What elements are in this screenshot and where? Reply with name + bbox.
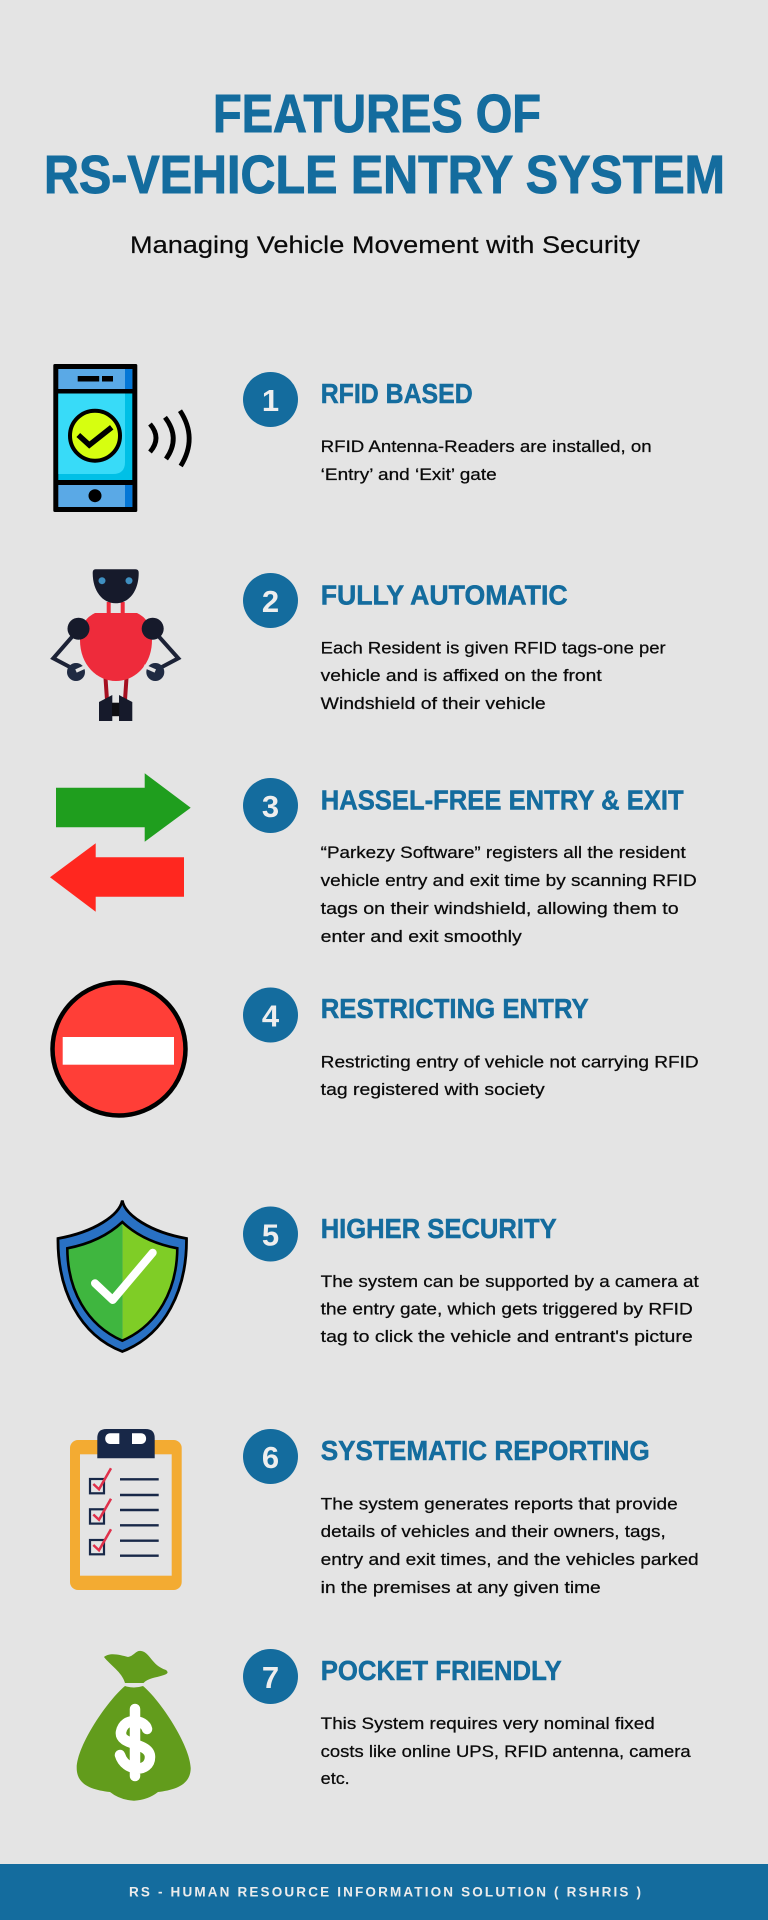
icon: phone with RFID waves [53,364,189,512]
number badge 1 [243,372,298,427]
body text 7: costs like online UPS, RFID antenna, camera [321,1742,691,1761]
body text 6: in the premises at any given time [321,1578,601,1597]
number badge 3 [243,778,298,833]
body text 1: ‘Entry’ and ‘Exit’ gate [321,465,497,484]
icon: money bag [77,1651,191,1801]
body text 7: etc. [321,1769,350,1788]
subtitle: Managing Vehicle Movement with Security [130,232,640,259]
body text 3: vehicle entry and exit time by scanning RFID [321,871,697,890]
body text 6: entry and exit times, and the vehicles parked [321,1550,699,1569]
icon: security shield [58,1200,187,1352]
heading: fully automatic: FULLY AUTOMATIC [321,579,568,610]
item 4 [243,988,699,1099]
body text 3: tags on their windshield, allowing them to [321,899,679,918]
body text 6: The system generates reports that provide [321,1494,678,1514]
body text 4: tag registered with society [321,1080,545,1099]
body text 7 [321,1714,691,1788]
footer band [0,1864,768,1920]
body text 1 [321,437,652,484]
heading: hassel-free entry and exit: HASSEL-FREE ENTRY & EXIT [321,784,684,815]
number badge 3: 3 [262,789,279,824]
body text 5: tag to click the vehicle and entrant's picture [321,1327,693,1346]
title [44,84,725,205]
number badge 2 [243,573,298,628]
body text 2: Each Resident is given RFID tags-one per [321,638,666,657]
heading: RFID based: RFID BASED [321,378,473,409]
number badge 1: 1 [262,383,279,418]
body text 4 [321,1053,699,1099]
body text 2 [321,638,666,713]
body text 3: “Parkezy Software” registers all the resident [321,843,686,862]
item 1 [243,372,652,484]
body text 6 [321,1494,699,1597]
footer band: RS - HUMAN RESOURCE INFORMATION SOLUTION ( RSHRIS ) [129,1884,641,1900]
item 7 [243,1649,691,1788]
item 2 [243,573,666,713]
icon: robot [53,569,178,721]
number badge 4 [243,988,298,1042]
number badge 6: 6 [262,1440,279,1475]
number badge 5: 5 [262,1218,279,1252]
heading: pocket friendly: POCKET FRIENDLY [321,1655,562,1686]
number badge 7: 7 [262,1660,279,1695]
number badge 7 [243,1649,298,1704]
number badge 6 [243,1429,298,1484]
heading: higher security: HIGHER SECURITY [321,1213,557,1244]
body text 3: enter and exit smoothly [321,927,522,946]
item 3 [243,778,697,946]
body text 5: the entry gate, which gets triggered by RFID [321,1300,693,1318]
icon: no-entry sign [52,982,186,1116]
body text 4: Restricting entry of vehicle not carrying RFID [321,1053,699,1072]
heading: systematic reporting: SYSTEMATIC REPORTING [321,1435,650,1466]
item 5 [243,1206,699,1346]
body text 2: vehicle and is affixed on the front [321,666,602,685]
body text 1: RFID Antenna-Readers are installed, on [321,437,652,456]
body text 3 [321,843,697,946]
body text 5: The system can be supported by a camera at [321,1272,699,1291]
body text 2: Windshield of their vehicle [321,694,546,713]
icon: green and red arrows [50,773,191,912]
number badge 2: 2 [262,584,279,619]
body text 7: This System requires very nominal fixed [321,1714,655,1733]
item 6 [243,1429,699,1597]
number badge 5 [243,1206,298,1262]
heading: restricting entry: RESTRICTING ENTRY [321,993,589,1024]
title: FEATURES OF [213,84,541,144]
icon: clipboard checklist [70,1429,182,1590]
number badge 4: 4 [262,998,280,1034]
body text 6: details of vehicles and their owners, tags, [321,1522,666,1541]
body text 5 [321,1272,699,1346]
